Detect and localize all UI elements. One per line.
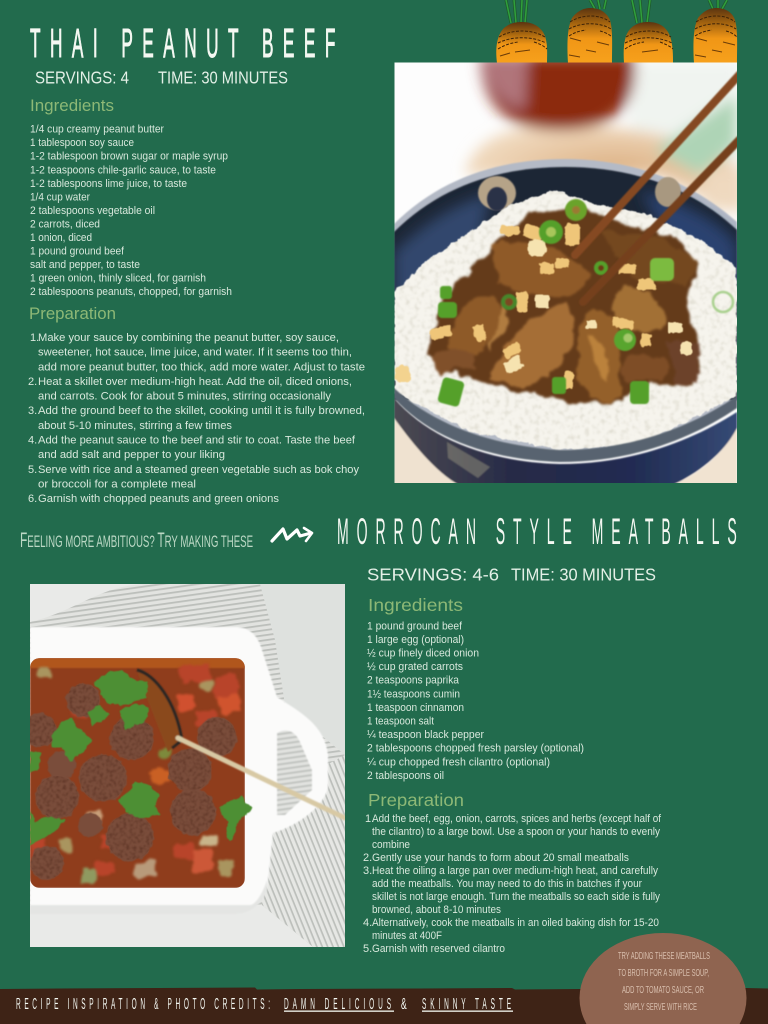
ingredient list: meatballs bbox=[367, 620, 584, 782]
title: thai peanut beef: THAI PEANUT BEEF bbox=[30, 20, 335, 66]
preparation steps: thai peanut beef: and add salt and pepper to your liking bbox=[38, 449, 225, 461]
preparation steps: thai peanut beef bbox=[28, 332, 365, 505]
peanuts bbox=[395, 222, 692, 389]
preparation steps: thai peanut beef: and carrots. Cook for about 5 minutes, stirring occasionally bbox=[38, 391, 332, 403]
servings and time: meatballs: TIME: 30 MINUTES bbox=[511, 564, 656, 584]
preparation steps: meatballs: skillet is not large enough. Turn the meatballs so each side is fully bbox=[372, 891, 660, 903]
ingredient list: meatballs: 2 tablespoons chopped fresh parsley (optional) bbox=[367, 743, 584, 755]
preparation steps: meatballs: 5. bbox=[363, 943, 372, 955]
callout: serving suggestion: ADD TO TOMATO SAUCE, OR bbox=[622, 984, 704, 996]
preparation steps: thai peanut beef: 3. bbox=[28, 405, 37, 417]
preparation steps: thai peanut beef: Make your sauce by combining the peanut butter, soy sauce, bbox=[38, 332, 339, 344]
lead-in text: FEELING MORE AMBITIOUS? TRY MAKING THESE bbox=[20, 529, 253, 552]
preparation steps: meatballs: Alternatively, cook the meatballs in an oiled baking dish for 15-20 bbox=[372, 917, 659, 929]
heading: ingredients: Ingredients bbox=[30, 97, 114, 115]
ingredient list: meatballs: 1 large egg (optional) bbox=[367, 634, 464, 646]
meat bbox=[425, 207, 700, 405]
callout: serving suggestion bbox=[580, 933, 746, 1024]
preparation steps: thai peanut beef: 6. bbox=[28, 493, 37, 505]
ingredient list: thai peanut beef: 1 tablespoon soy sauce bbox=[30, 137, 134, 149]
servings and time: thai peanut beef: SERVINGS: 4 bbox=[35, 68, 129, 88]
preparation steps: thai peanut beef: Garnish with chopped peanuts and green onions bbox=[38, 493, 280, 505]
icon: carrot 2 bbox=[567, 0, 612, 63]
preparation steps: thai peanut beef: 2. bbox=[28, 376, 37, 388]
servings and time: thai peanut beef bbox=[35, 68, 288, 88]
preparation steps: thai peanut beef: Add the peanut sauce to the beef and stir to coat. Taste the beef bbox=[38, 434, 356, 446]
heading: preparation (meatballs): Preparation bbox=[368, 790, 464, 810]
photo: meatballs in white dish bbox=[23, 584, 345, 947]
icon: carrot 3 bbox=[624, 0, 673, 63]
ingredient list: meatballs: 2 tablespoons oil bbox=[367, 770, 444, 782]
green onions bbox=[437, 199, 733, 407]
servings and time: meatballs bbox=[367, 564, 656, 584]
preparation steps: meatballs: Garnish with reserved cilantro bbox=[372, 943, 505, 955]
footer credits: & bbox=[401, 995, 407, 1013]
ingredient list: meatballs: 1 teaspoon salt bbox=[367, 716, 434, 728]
preparation steps: thai peanut beef: or broccoli for a complete meal bbox=[38, 478, 196, 490]
ingredient list: thai peanut beef: 2 carrots, diced bbox=[30, 218, 100, 230]
ingredient list: thai peanut beef: 1-2 tablespoons lime juice, to taste bbox=[30, 178, 187, 190]
preparation steps: thai peanut beef: 5. bbox=[28, 464, 37, 476]
footer credits: DAMN DELICIOUS bbox=[284, 995, 391, 1013]
ingredient list: thai peanut beef: 1 pound ground beef bbox=[30, 245, 125, 257]
cilantro leaves bbox=[30, 670, 252, 845]
preparation steps: meatballs: 1. bbox=[365, 813, 374, 825]
preparation steps: meatballs: Add the beef, egg, onion, carrots, spices and herbs (except half of bbox=[372, 813, 662, 825]
ingredient list: thai peanut beef bbox=[30, 124, 232, 298]
preparation steps: thai peanut beef: 1. bbox=[30, 332, 39, 344]
lower bowl bbox=[394, 398, 737, 490]
ingredient list: meatballs: 1 teaspoon cinnamon bbox=[367, 702, 464, 714]
ingredient list: thai peanut beef: 1-2 teaspoons chile-garlic sauce, to taste bbox=[30, 164, 216, 176]
preparation steps: thai peanut beef: add more peanut butter, too thick, add more water. Adjust to taste bbox=[38, 361, 365, 373]
ingredient list: thai peanut beef: 2 tablespoons vegetable oil bbox=[30, 205, 155, 217]
ingredient list: thai peanut beef: 1 onion, diced bbox=[30, 232, 92, 244]
ingredient list: meatballs: ¼ cup chopped fresh cilantro (optional) bbox=[367, 756, 550, 768]
ingredient list: meatballs: 1½ teaspoons cumin bbox=[367, 688, 460, 700]
preparation steps: meatballs: add the meatballs. You may need to do this in batches if your bbox=[372, 878, 642, 890]
heading: preparation: Preparation bbox=[29, 305, 116, 323]
ingredient list: thai peanut beef: salt and pepper, to taste bbox=[30, 259, 140, 271]
footer credits: SKINNY TASTE bbox=[422, 995, 511, 1013]
preparation steps: meatballs: 2. bbox=[363, 852, 372, 864]
preparation steps: meatballs: combine bbox=[372, 839, 410, 851]
preparation steps: meatballs: browned, about 8-10 minutes bbox=[372, 904, 501, 916]
preparation steps: thai peanut beef: Heat a skillet over medium-high heat. Add the oil, diced onions, bbox=[38, 376, 352, 388]
preparation steps: thai peanut beef: about 5-10 minutes, stirring a few times bbox=[38, 420, 232, 432]
preparation steps: meatballs bbox=[363, 813, 662, 955]
photo: thai peanut beef bowl with chopsticks bbox=[394, 55, 745, 490]
preparation steps: meatballs: 4. bbox=[363, 917, 372, 929]
ingredient list: meatballs: ½ cup grated carrots bbox=[367, 661, 463, 673]
servings and time: thai peanut beef: TIME: 30 MINUTES bbox=[158, 68, 288, 88]
footer credits bbox=[16, 995, 513, 1013]
preparation steps: meatballs: Gently use your hands to form about 20 small meatballs bbox=[372, 852, 629, 864]
preparation steps: thai peanut beef: Serve with rice and a steamed green vegetable such as bok choy bbox=[38, 464, 359, 476]
ingredient list: meatballs: ½ cup finely diced onion bbox=[367, 648, 479, 660]
ingredient list: thai peanut beef: 1/4 cup water bbox=[30, 191, 90, 203]
footer band bbox=[0, 988, 768, 1024]
icon: carrot 4 bbox=[693, 0, 737, 63]
footer credits: RECIPE INSPIRATION & PHOTO CREDITS: bbox=[16, 995, 270, 1013]
arrow bbox=[272, 528, 312, 541]
ingredient list: meatballs: 1 pound ground beef bbox=[367, 620, 463, 632]
ingredient list: thai peanut beef: 2 tablespoons peanuts, chopped, for garnish bbox=[30, 286, 232, 298]
preparation steps: meatballs: minutes at 400F bbox=[372, 930, 442, 942]
preparation steps: meatballs: 3. bbox=[363, 865, 372, 877]
servings and time: meatballs: SERVINGS: 4-6 bbox=[367, 564, 499, 584]
preparation steps: meatballs: the cilantro) to a large bowl. Use a spoon or your hands to evenly bbox=[372, 826, 660, 838]
callout: serving suggestion: SIMPLY SERVE WITH RICE bbox=[624, 1001, 697, 1013]
preparation steps: thai peanut beef: Add the ground beef to the skillet, cooking until it is fully browned, bbox=[38, 405, 365, 417]
ingredient list: meatballs: ¼ teaspoon black pepper bbox=[367, 729, 484, 741]
preparation steps: thai peanut beef: sweetener, hot sauce, lime juice, and water. If it seems too thin, bbox=[38, 347, 352, 359]
preparation steps: meatballs: Heat the oiling a large pan over medium-high heat, and carefully bbox=[372, 865, 658, 877]
spoon bbox=[137, 670, 345, 818]
icon: carrot 1 bbox=[496, 0, 547, 63]
carrot illustrations bbox=[496, 0, 737, 63]
rice bbox=[394, 190, 737, 450]
ingredient list: thai peanut beef: 1 green onion, thinly sliced, for garnish bbox=[30, 272, 206, 284]
preparation steps: thai peanut beef: 4. bbox=[28, 434, 37, 446]
heading: ingredients (meatballs): Ingredients bbox=[368, 595, 463, 615]
ingredient list: thai peanut beef: 1/4 cup creamy peanut butter bbox=[30, 124, 164, 136]
ingredient list: meatballs: 2 teaspoons paprika bbox=[367, 675, 460, 687]
ingredient list: thai peanut beef: 1-2 tablespoon brown sugar or maple syrup bbox=[30, 151, 228, 163]
chopsticks bbox=[575, 74, 740, 302]
title: morrocan style meatballs: MORROCAN STYLE MEATBALLS bbox=[337, 511, 737, 552]
